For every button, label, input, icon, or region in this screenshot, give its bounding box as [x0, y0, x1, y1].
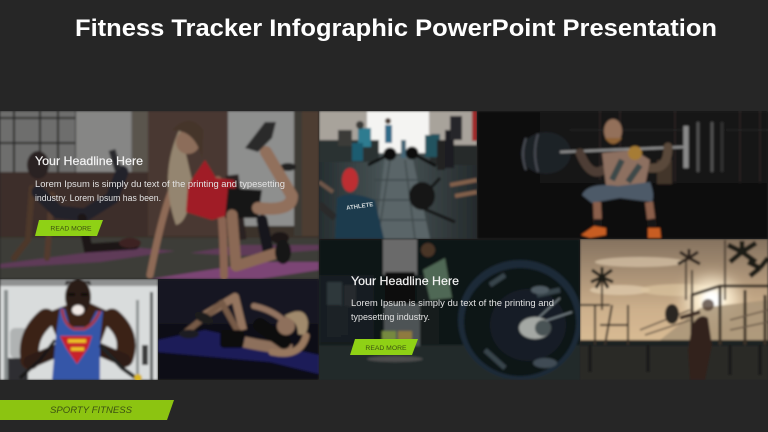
banner: sporty fitness: SPORTY FITNESS	[50, 405, 133, 416]
headline: Your Headline Here	[35, 154, 143, 168]
body text	[351, 298, 554, 322]
button: read more	[350, 339, 418, 355]
headline: Your Headline Here	[351, 274, 459, 288]
body text: industry. Lorem Ipsum has been.	[35, 193, 161, 203]
back woman	[232, 175, 240, 240]
panel: weightlifter squat photo	[477, 111, 768, 239]
centre woman	[150, 182, 176, 275]
panel: weight plate photo with headline	[319, 239, 582, 380]
body text	[35, 179, 285, 203]
left woman	[14, 188, 32, 258]
panel: sunset outdoor gym photo	[580, 239, 768, 380]
photo: women exercising on mats	[0, 111, 319, 279]
panel: group floor exercise photo with headline	[0, 111, 319, 279]
body text: Lorem Ipsum is simply du text of the printing and	[351, 298, 554, 308]
button: read more: READ MORE	[365, 345, 407, 352]
photo: barbell plate foreground, people behind	[319, 239, 582, 380]
title: Fitness Tracker Infographic PowerPoint Presentation	[75, 15, 717, 42]
body text: typesetting industry.	[351, 312, 430, 322]
banner: sporty fitness	[0, 400, 174, 420]
body text: Lorem Ipsum is simply du text of the printing and typesetting	[35, 179, 285, 189]
button: read more: READ MORE	[50, 226, 92, 232]
shirt label: ATHLETE	[346, 202, 374, 212]
button: read more	[35, 220, 103, 236]
panel: woman doing crunches photo	[158, 279, 319, 380]
panel: man with resistance bands photo	[0, 279, 158, 382]
panel: crossfit class photo	[319, 111, 477, 239]
